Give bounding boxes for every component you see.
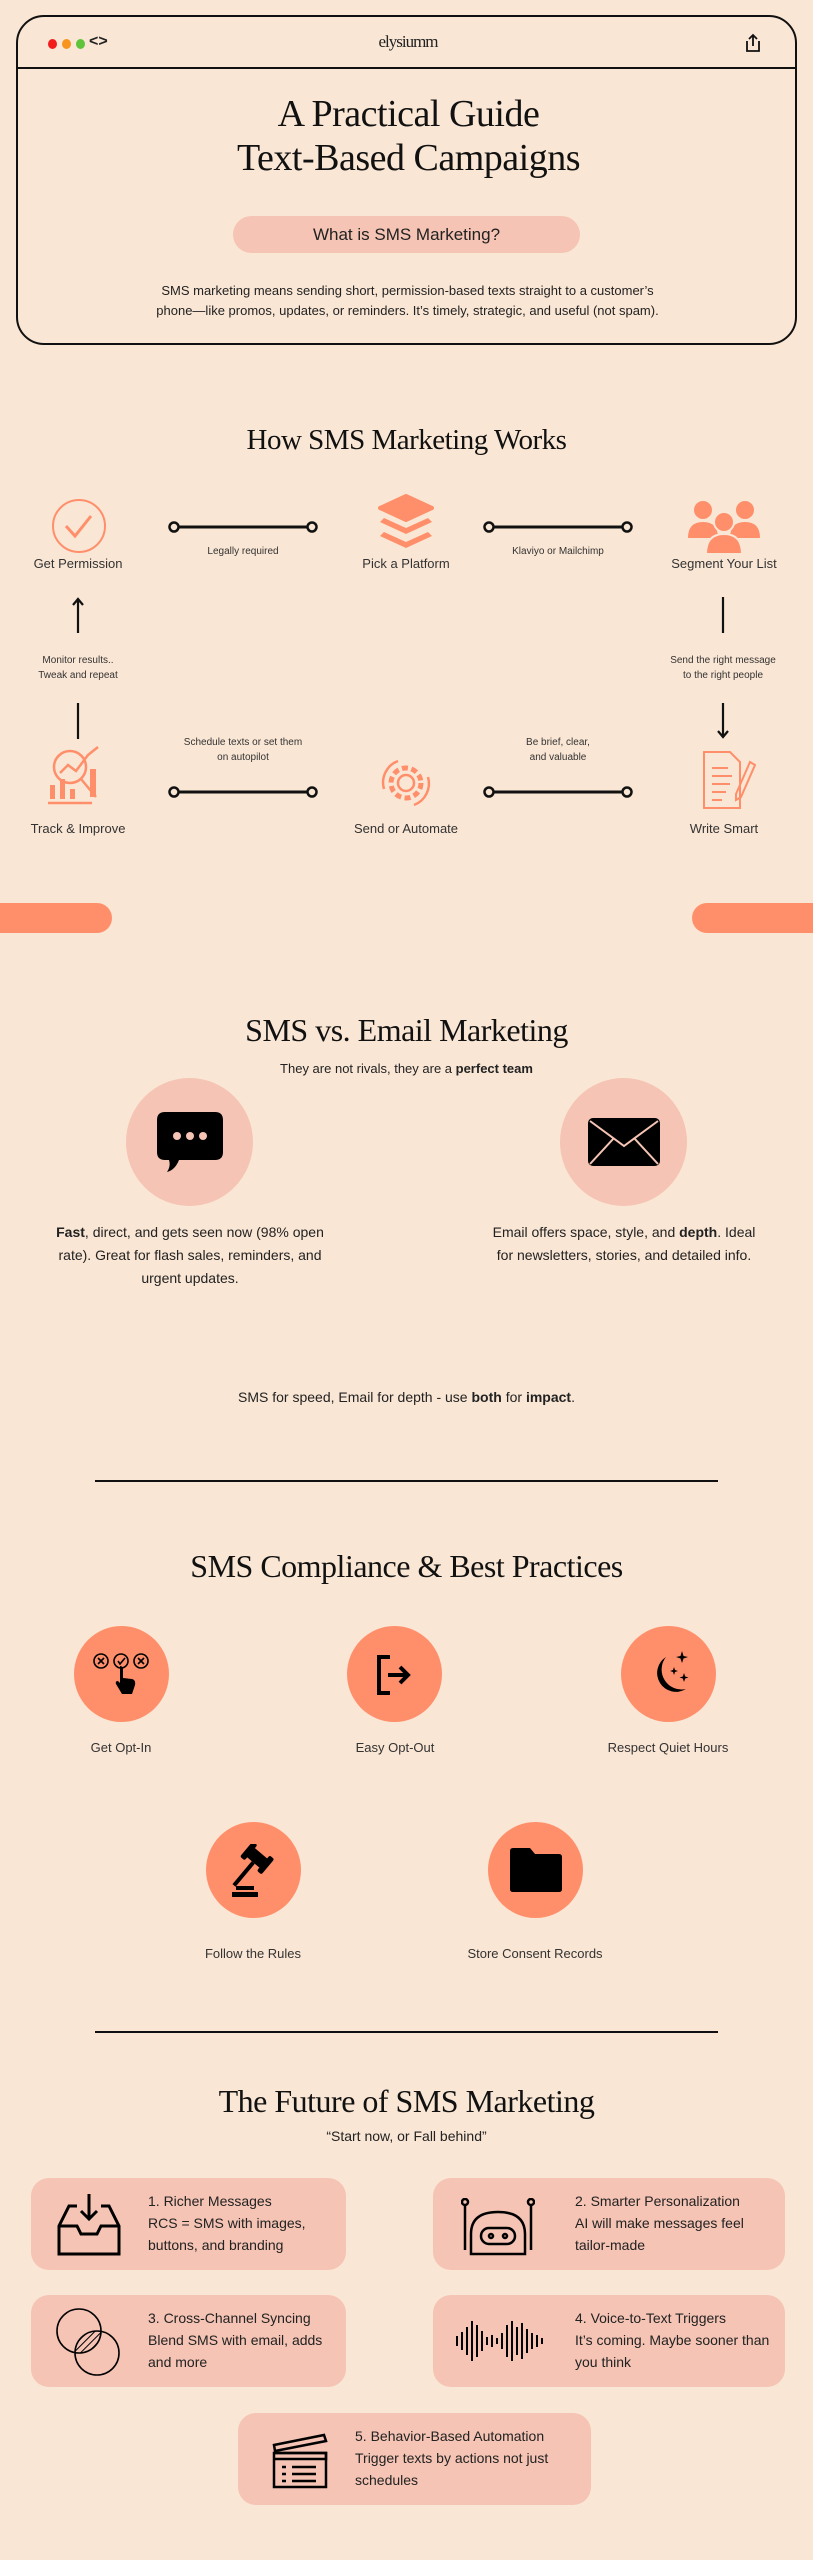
arrow: down with note: Send the right message (670, 655, 776, 666)
item: Respect Quiet Hours: Respect Quiet Hours (608, 1740, 728, 1755)
card 2: 2. Smarter Personalization (575, 2193, 740, 2209)
heading: Compliance: SMS Compliance & Best Practices (190, 1548, 623, 1584)
item: Follow the Rules (205, 1822, 301, 1961)
text: SMS: Fast, direct, and gets seen now (98% open rate). Great for flash sales, reminders, and urgent updates. (56, 1224, 324, 1286)
arrow: down with note: to the right people (683, 670, 763, 681)
arrow: up with note (38, 597, 118, 739)
text: Email: Email offers space, style, and depth. Ideal for newsletters, stories, and detailed info. (493, 1224, 755, 1263)
connector: Klaviyo or Mailchimp (483, 521, 633, 557)
icon: envelope (560, 1078, 687, 1206)
panel: Email (493, 1078, 755, 1263)
card 5 (238, 2413, 591, 2505)
card 4: It’s coming. Maybe sooner than you think (575, 2332, 769, 2370)
item: Get Opt-In: Get Opt-In (91, 1740, 151, 1755)
heading: Future: The Future of SMS Marketing (219, 2083, 594, 2119)
pill: What is SMS Marketing (233, 216, 580, 253)
step: Pick a Platform: Pick a Platform (362, 556, 450, 571)
step: Write Smart: Write Smart (690, 821, 758, 836)
card 5: 5. Behavior-Based Automation (355, 2428, 544, 2444)
decorative orange tabs (0, 903, 112, 933)
item: Store Consent Records (467, 1822, 603, 1961)
card 1 (31, 2178, 346, 2270)
connector: Be brief: Be brief, clear, (526, 737, 590, 748)
title (237, 93, 580, 179)
item: Follow the Rules: Follow the Rules (205, 1946, 301, 1961)
arrow: down with note (670, 597, 776, 739)
title: Text-Based Campaigns (237, 137, 580, 179)
item: Store Consent Records: Store Consent Records (467, 1946, 603, 1961)
step: Track & Improve (30, 746, 125, 836)
icon: inbox (58, 2194, 120, 2256)
card 2 (433, 2178, 785, 2270)
browser bar (18, 17, 795, 69)
connector: Be brief (483, 737, 633, 798)
card 4: 4. Voice-to-Text Triggers (575, 2310, 726, 2326)
card 1: RCS = SMS with images, buttons, and branding (148, 2215, 306, 2253)
connector: Klaviyo or Mailchimp: Klaviyo or Mailchimp (512, 546, 604, 557)
connector: Legally required: Legally required (207, 546, 279, 557)
heading: How SMS Marketing Works: How SMS Marketing Works (247, 424, 566, 456)
card 1: 1. Richer Messages (148, 2193, 272, 2209)
step: Pick a Platform (362, 494, 450, 571)
connector: Legally required (168, 521, 318, 557)
logo: elysiumm (378, 32, 438, 51)
card 5: Trigger texts by actions not just schedules (355, 2450, 548, 2488)
header card (16, 15, 797, 345)
title: A Practical Guide (278, 93, 539, 135)
icon: robot (461, 2198, 535, 2256)
step: Send or Automate (354, 760, 458, 836)
arrow: up with note: Monitor results.. (42, 655, 114, 666)
card 3: Blend SMS with email, adds and more (148, 2332, 322, 2370)
icon: venn (56, 2308, 120, 2376)
icon: clapperboard (272, 2434, 328, 2488)
step: Send or Automate: Send or Automate (354, 821, 458, 836)
connector: Be brief: and valuable (530, 752, 586, 763)
heading: SMS vs Email: SMS vs. Email Marketing (245, 1012, 568, 1048)
icon: share (746, 34, 760, 52)
item: Respect Quiet Hours (608, 1626, 728, 1755)
item: Easy Opt-Out: Easy Opt-Out (356, 1740, 434, 1755)
card 2: AI will make messages feel tailor-made (575, 2215, 744, 2253)
connector: Schedule texts: Schedule texts or set them (184, 737, 302, 748)
panel: SMS (56, 1078, 324, 1286)
item: Get Opt-In (74, 1626, 169, 1755)
card 3 (31, 2295, 346, 2387)
subtitle: They are not rivals, they are a perfect team (280, 1061, 533, 1076)
step: Get Permission (34, 499, 122, 571)
intro text: SMS marketing means sending short, permission-based texts straight to a customer’s phone—like promos, updates, or reminders. It’s timely, strategic, and useful (not spam). (156, 283, 659, 318)
connector: Schedule texts (168, 737, 318, 798)
pill: What is SMS Marketing: What is SMS Marketing? (313, 225, 500, 244)
item: Easy Opt-Out (347, 1626, 442, 1755)
step: Write Smart (690, 751, 758, 836)
subtitle: “Start now, or Fall behind” (326, 2128, 487, 2144)
icon: sound wave (456, 2321, 543, 2361)
step: Track & Improve: Track & Improve (31, 821, 125, 836)
text: summary: SMS for speed, Email for depth - use both for impact. (238, 1389, 575, 1405)
arrow: up with note: Tweak and repeat (38, 670, 118, 681)
card 4 (433, 2295, 785, 2387)
step: Get Permission: Get Permission (34, 556, 122, 571)
step: Segment Your List: Segment Your List (671, 556, 777, 571)
icon: chat bubble (126, 1078, 253, 1206)
connector: Schedule texts: on autopilot (217, 752, 269, 763)
icon: window dots (48, 33, 108, 50)
icon: window dots: <> (89, 33, 108, 50)
card 3: 3. Cross-Channel Syncing (148, 2310, 311, 2326)
step: Segment Your List (671, 501, 777, 571)
